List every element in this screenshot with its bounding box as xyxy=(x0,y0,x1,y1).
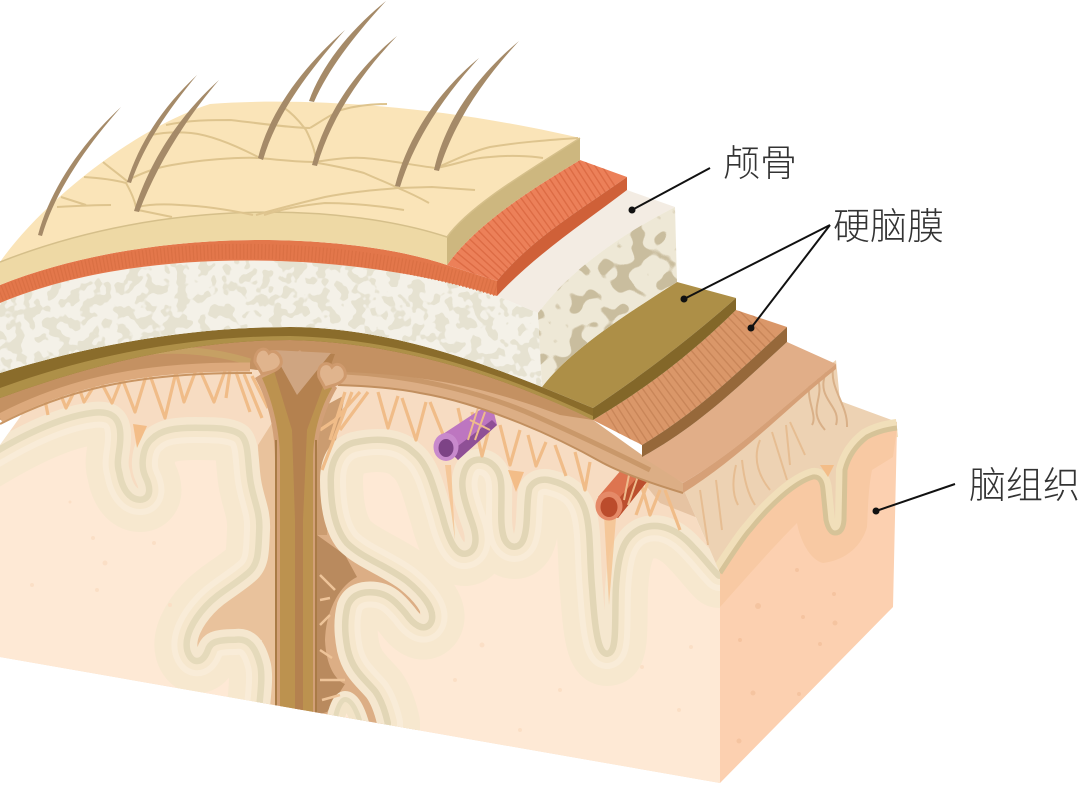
dura mater inner layer xyxy=(593,310,787,457)
leader lines: dura mater xyxy=(680,225,830,332)
skull bone xyxy=(0,190,690,400)
muscle top surface xyxy=(447,160,627,281)
tan space beside midline xyxy=(197,424,276,706)
right side trabeculae xyxy=(700,368,847,545)
tan space right of midline xyxy=(317,530,420,730)
arachnoid front band xyxy=(338,360,683,493)
label text: skull: 颅骨 xyxy=(723,143,797,184)
bone front face xyxy=(0,260,542,387)
shaded space under arachnoid edge xyxy=(645,483,696,517)
falx midline xyxy=(0,338,593,722)
scalp side xyxy=(447,138,580,265)
brain block right face xyxy=(720,428,897,783)
brain block upper surface right xyxy=(683,360,897,573)
sulcus accents and small vessels xyxy=(133,424,616,605)
scalp xyxy=(0,102,580,285)
under-dura tan layer xyxy=(0,338,593,420)
scalp top xyxy=(0,102,580,262)
small lower gyrus xyxy=(328,691,369,722)
label text: dura mater: 硬脑膜 xyxy=(833,206,944,247)
upper dark space right of midline xyxy=(317,395,345,535)
brain block front face xyxy=(0,369,720,783)
right gyrus xyxy=(328,436,720,783)
label text: brain tissue: 脑组织 xyxy=(969,465,1080,506)
leader line: brain tissue xyxy=(872,484,955,514)
meningeal loops xyxy=(255,349,345,388)
muscle layer xyxy=(0,160,627,303)
muscle side xyxy=(497,177,627,296)
sinus triangle xyxy=(272,350,331,395)
brain tissue block xyxy=(0,358,897,785)
red vessel xyxy=(596,462,650,520)
purple vessel xyxy=(434,405,497,461)
label: brain tissue xyxy=(872,465,1080,514)
leader line: skull xyxy=(628,168,710,214)
bone cut face with pores xyxy=(538,207,677,387)
midline edge lines xyxy=(275,440,317,722)
left gyrus xyxy=(0,410,264,730)
brain tissue speckles xyxy=(30,500,693,732)
lower dark crescent right of midline xyxy=(317,535,357,715)
label: skull xyxy=(628,143,797,214)
label: dura mater xyxy=(680,206,944,332)
midline central brown xyxy=(274,354,335,710)
hairs xyxy=(38,1,519,236)
scalp wrinkles xyxy=(57,104,578,217)
midline outer stripes xyxy=(255,350,337,722)
trabeculae in subarachnoid space xyxy=(45,368,680,700)
muscle front xyxy=(0,240,497,303)
gyrus outer halo xyxy=(0,402,720,724)
midline gold bands xyxy=(262,360,332,722)
bone top surface xyxy=(497,190,675,313)
dura mater outer layer xyxy=(0,282,736,420)
left membrane stripes xyxy=(0,350,252,424)
scalp front xyxy=(0,212,447,285)
arachnoid surface xyxy=(642,342,836,493)
